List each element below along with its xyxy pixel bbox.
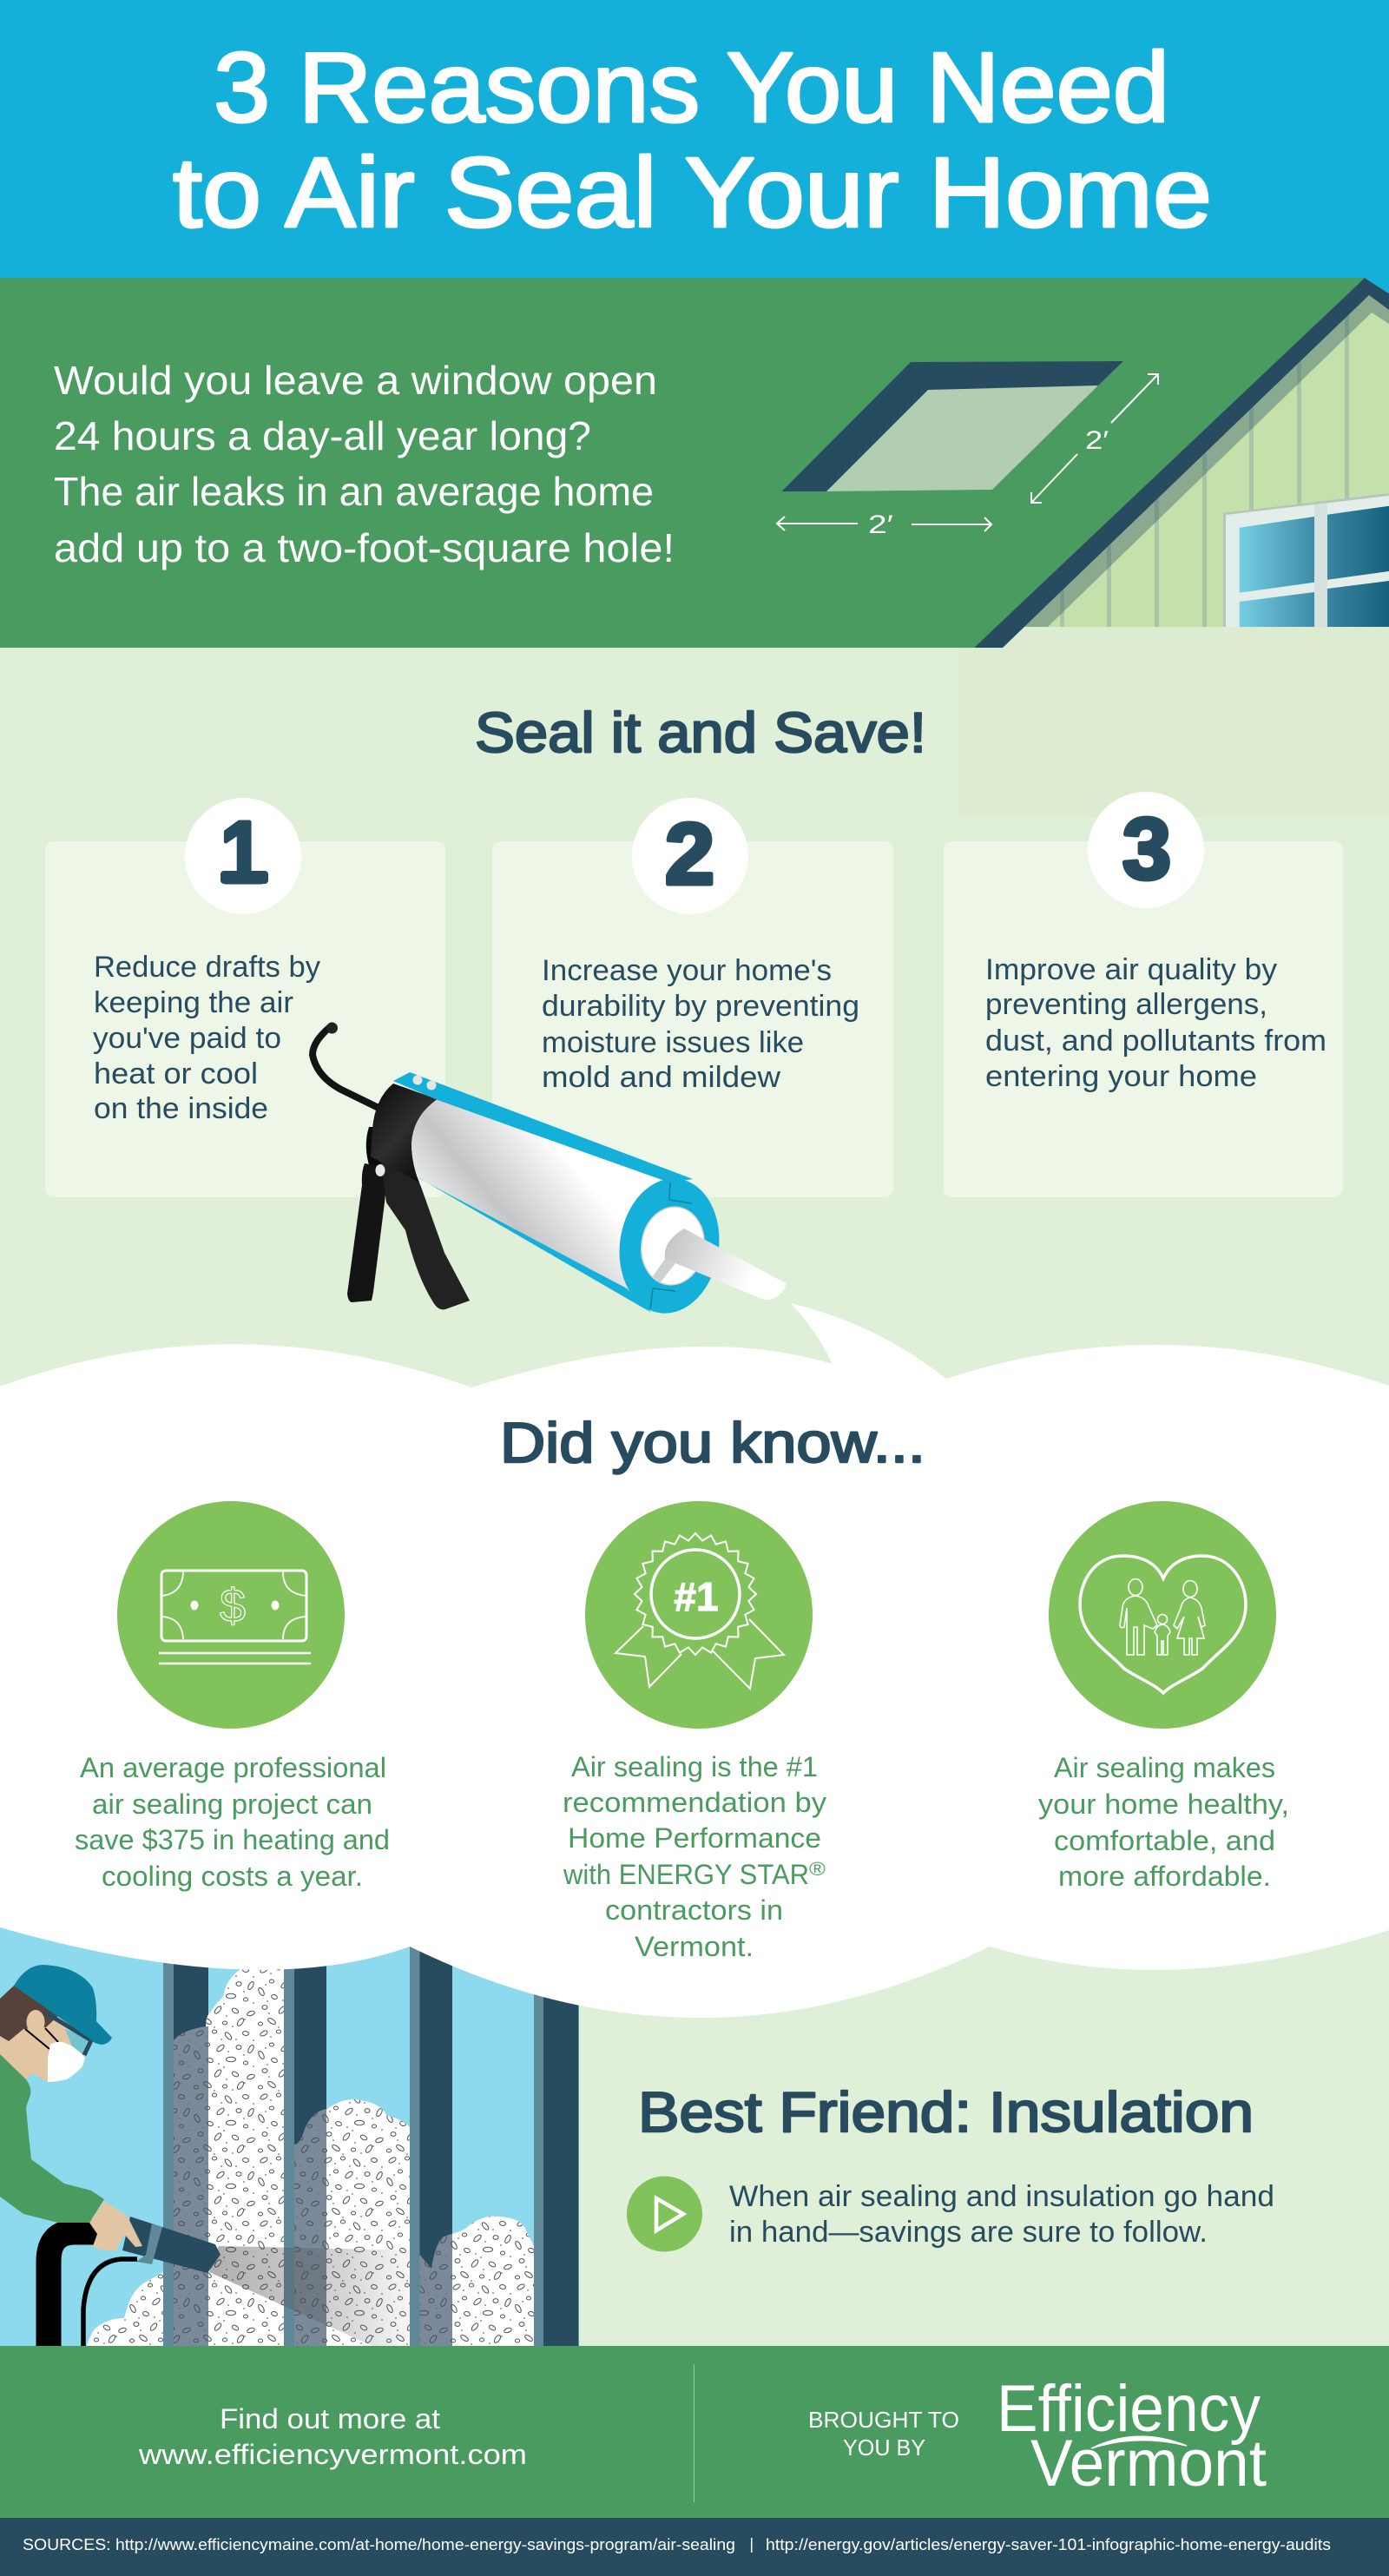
fact text: savings: An average professional	[80, 1752, 386, 1783]
card 1 text: keeping the air	[94, 986, 293, 1019]
trigger handle	[380, 1156, 470, 1309]
intro text: Would you leave a window open	[54, 358, 657, 403]
intro text	[54, 358, 675, 570]
heading: seal it and save: Seal it and Save!	[475, 701, 926, 764]
jacket	[0, 2054, 104, 2223]
fact text: recommendation	[563, 1751, 826, 1962]
title: to Air Seal Your Home	[173, 138, 1212, 248]
header banner	[0, 0, 1389, 279]
cap notches	[650, 1183, 692, 1309]
sources bar: http://energy.gov/articles/energy-saver-101-infographic-home-energy-audits	[766, 2536, 1331, 2553]
sources bar	[0, 2518, 1389, 2576]
number badge 2	[632, 798, 748, 914]
card 1 text: on the inside	[94, 1092, 268, 1125]
intro text: 24 hours a day-all year long?	[54, 413, 591, 458]
card 1 text: Reduce drafts by	[94, 951, 320, 984]
fact text: recommendation: recommendation by	[563, 1787, 826, 1818]
brought to you by	[808, 2407, 959, 2461]
title: 3 Reasons You Need	[214, 33, 1169, 143]
ear	[26, 2010, 45, 2034]
number badge 3: 3	[1122, 800, 1171, 898]
call to action	[138, 2403, 527, 2470]
card 3 text: Improve air quality by	[985, 953, 1277, 986]
fact text: savings	[75, 1752, 390, 1892]
panel: roof with intro	[0, 278, 1389, 648]
card 2 text: mold and mildew	[542, 1061, 780, 1094]
gun head	[371, 1084, 438, 1183]
stud highlights	[163, 1927, 543, 2346]
icon: money: $	[220, 1580, 246, 1632]
fact text: recommendation: with ENERGY STAR	[563, 1859, 809, 1890]
card 3 text	[985, 953, 1326, 1093]
window	[1223, 493, 1389, 627]
card 2 text	[542, 954, 859, 1094]
fact text: recommendation: Home Performance	[568, 1822, 821, 1854]
hose	[49, 2232, 137, 2346]
blue end cap	[611, 1172, 727, 1320]
heading: did you know: Did you know...	[500, 1411, 925, 1474]
panel: house wall with window	[1024, 295, 1389, 627]
face	[0, 2015, 85, 2082]
fact text: recommendation: Air sealing is the #1	[571, 1751, 818, 1782]
hat	[14, 1965, 112, 2045]
insulation text: in hand—savings are sure to follow.	[729, 2216, 1208, 2249]
spray foam	[87, 1966, 534, 2346]
rear grip	[366, 1127, 386, 1168]
fact text: healthy home: your home healthy,	[1038, 1789, 1289, 1820]
nozzle	[665, 1229, 786, 1300]
insulation text	[729, 2180, 1274, 2249]
fact text: recommendation: Vermont.	[635, 1931, 754, 1962]
insulation text: When air sealing and insulation go hand	[729, 2180, 1274, 2213]
fact text: healthy home: more affordable.	[1058, 1861, 1271, 1892]
intro text: add up to a two-foot-square hole!	[54, 525, 675, 570]
card 2 text: durability by preventing	[542, 990, 859, 1023]
front handle	[347, 1163, 388, 1302]
fact text: recommendation: ®	[809, 1858, 826, 1880]
arrows: two foot dimensions: 2′	[1085, 426, 1109, 455]
hair	[0, 1986, 59, 2041]
pivot screw	[375, 1164, 385, 1176]
icon: skylight hole	[781, 361, 1123, 491]
footer band	[0, 2346, 1389, 2518]
panel: did you know cloud	[0, 1303, 1389, 2018]
call to action: www.efficiencyvermont.com	[138, 2439, 527, 2470]
panel: card 3	[944, 792, 1343, 1197]
logo: Efficiency Vermont: Efficiency	[997, 2372, 1261, 2446]
call to action: Find out more at	[220, 2403, 440, 2434]
hand	[89, 2201, 142, 2250]
rod	[313, 1027, 377, 1107]
wall studs	[174, 1927, 578, 2346]
card 2 text: Increase your home's	[542, 954, 832, 987]
goggles	[45, 2013, 91, 2055]
card 1 text	[93, 951, 320, 1125]
card 1 text: heat or cool	[94, 1057, 258, 1090]
brought to you by: BROUGHT TO	[808, 2407, 959, 2433]
fact text: savings: cooling costs a year.	[102, 1861, 363, 1892]
fact text: healthy home: comfortable, and	[1054, 1825, 1275, 1856]
icon: family heart	[1049, 1501, 1276, 1729]
title	[173, 33, 1212, 248]
panel: card 1	[45, 798, 445, 1197]
card 1 text: you've paid to	[93, 1022, 281, 1055]
number badge 1	[185, 798, 301, 914]
top rail	[393, 1072, 693, 1183]
sources bar: SOURCES: http://www.efficiencymaine.com/at-home/home-energy-savings-program/air-sealing	[23, 2536, 735, 2553]
rail screws	[413, 1075, 436, 1090]
number badge 2: 2	[665, 806, 714, 903]
card 2 text: moisture issues like	[542, 1026, 804, 1059]
card 3 text: entering your home	[985, 1060, 1257, 1093]
fact text: recommendation: contractors in	[605, 1894, 783, 1926]
nozzle shadow	[653, 1259, 675, 1283]
number badge 1: 1	[221, 804, 264, 901]
arrows: two foot dimensions: 2′	[868, 511, 893, 539]
fact text: savings: air sealing project can	[92, 1789, 372, 1820]
spray stream	[209, 2246, 426, 2346]
arrows: two foot dimensions	[777, 374, 1158, 539]
logo: Efficiency Vermont: Vermont	[1030, 2427, 1267, 2500]
card 3 text: preventing allergens,	[985, 988, 1267, 1021]
logo: Efficiency Vermont	[997, 2372, 1267, 2500]
icon: number one ribbon	[585, 1501, 813, 1729]
cap opening	[636, 1202, 709, 1289]
fact text: savings: save $375 in heating and	[75, 1824, 390, 1855]
caulk tube	[411, 1099, 686, 1302]
intro text: The air leaks in an average home	[54, 469, 654, 514]
icon: number one ribbon: #1	[674, 1574, 719, 1619]
fact text: healthy home	[1038, 1752, 1289, 1892]
heading: best friend insulation: Best Friend: Insulation	[638, 2080, 1254, 2144]
mask straps	[25, 2028, 58, 2049]
icon: money	[117, 1501, 345, 1729]
panel: insulation scene	[0, 1910, 579, 2346]
rod knob	[326, 1023, 338, 1033]
icon: play bullet	[627, 2176, 702, 2252]
brought to you by: YOU BY	[843, 2434, 925, 2461]
mask	[48, 2042, 85, 2082]
panel: card 2	[492, 798, 893, 1197]
fact text: healthy home: Air sealing makes	[1054, 1752, 1275, 1783]
worker	[0, 1965, 221, 2346]
sprayer nozzle	[122, 2217, 221, 2273]
caulk gun	[313, 1023, 786, 1320]
lower rail	[413, 1175, 652, 1313]
card 3 text: dust, and pollutants from	[985, 1024, 1326, 1057]
number badge 3	[1088, 792, 1204, 908]
